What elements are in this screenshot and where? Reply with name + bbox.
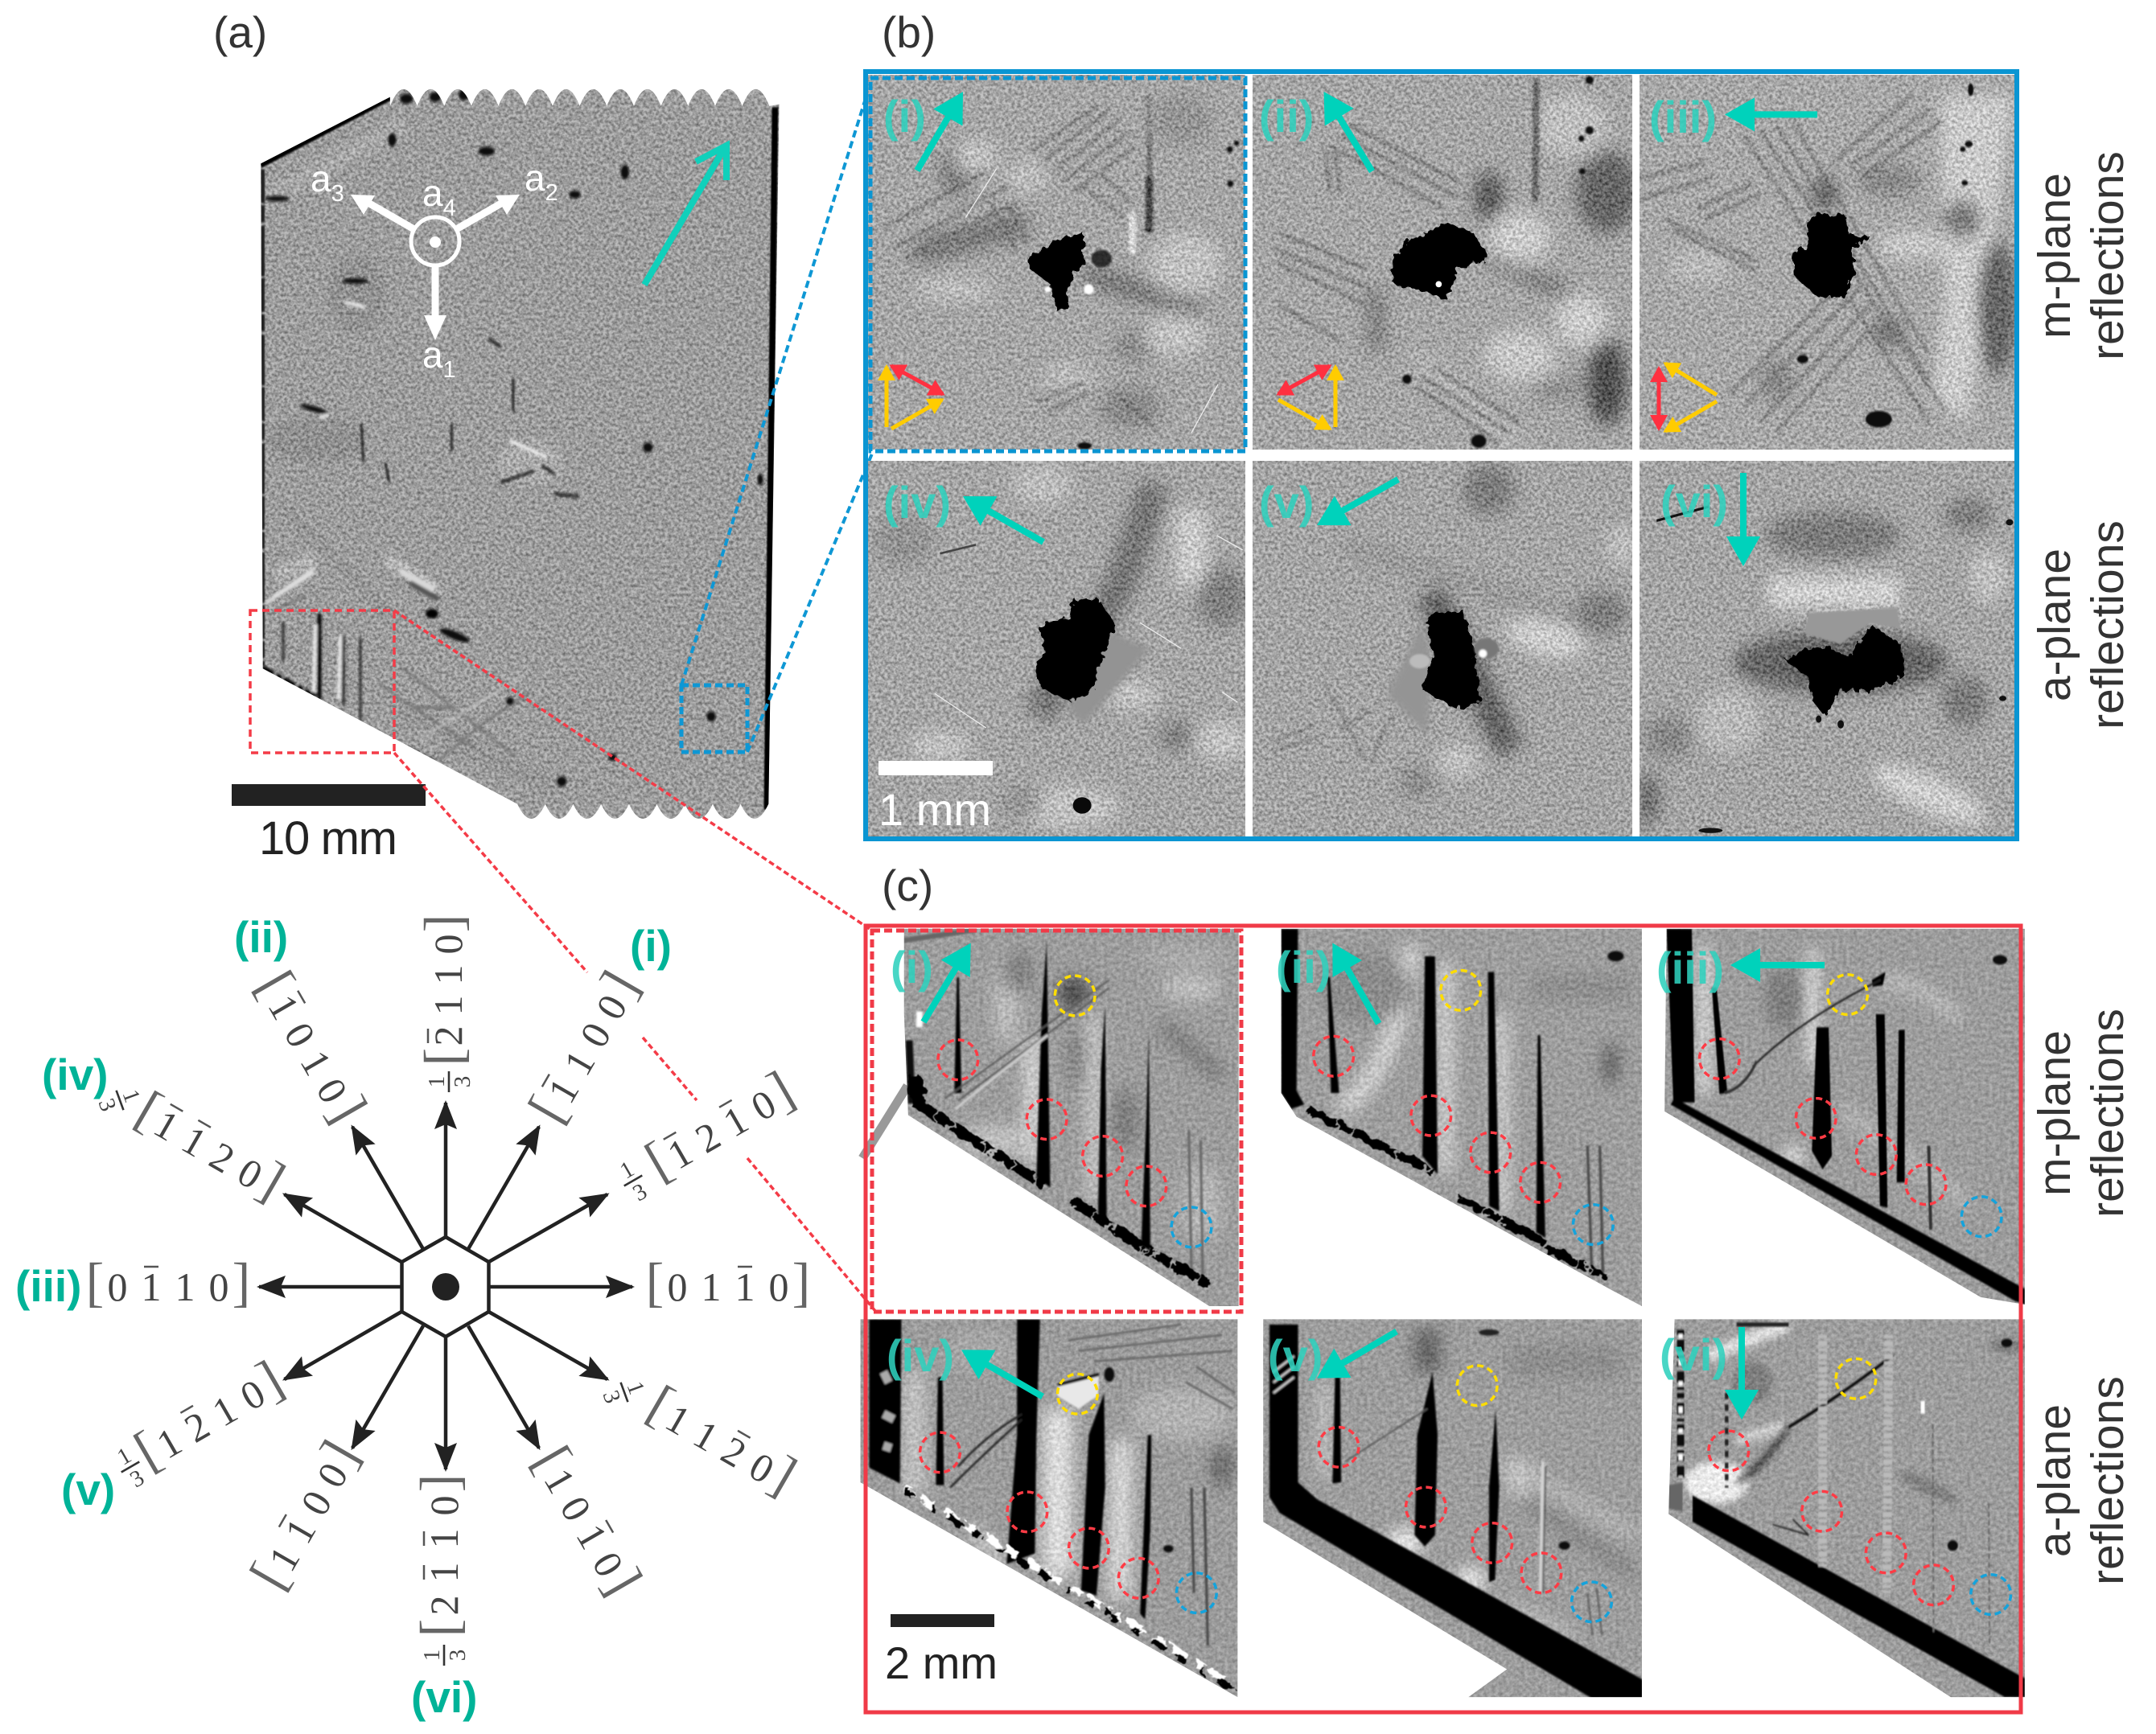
text: one-third fractions (92, 1071, 656, 1666)
arrows: cyan vectors in panel b (917, 109, 1817, 546)
text: Miller indices: ] (760, 1444, 807, 1506)
text: Miller indices: [ (638, 1373, 685, 1435)
frame: red panel c border (866, 926, 2021, 1712)
white bar and label: 1 mm scale (878, 761, 993, 835)
heading: panel b label: (b) (882, 7, 936, 57)
frame: blue panel b border (866, 72, 2017, 839)
arrows: twelve direction vectors (259, 1103, 632, 1469)
text: one-third fractions: 1 (622, 1379, 650, 1398)
labels: green direction numerals: (v) (61, 1465, 115, 1514)
text: a-plane row label for panel b: a-plane (2029, 549, 2080, 701)
arrow: cyan diffraction vector in panel a (644, 146, 726, 285)
text: Miller indices: ] (409, 1474, 470, 1492)
image: c reflection (iii) (1653, 925, 2031, 1327)
text: Miller indices: ] (246, 1348, 293, 1410)
text: one-third fractions: 1 (419, 1650, 445, 1661)
callout: red dashed selection of reflection (i) (872, 931, 1241, 1312)
text: m-plane row label for panel b: m-plane (2029, 173, 2080, 339)
panel: c slip band images (853, 925, 2035, 1705)
image: c reflection (i) (853, 925, 1255, 1327)
text: Miller indices: 1100 (539, 987, 636, 1111)
labels: reflection numerals in panel b (883, 91, 1728, 528)
text: one-third fractions: 1 (615, 1157, 639, 1184)
text: Miller indices: 1120 (146, 1101, 270, 1198)
text: Miller indices: [ (124, 1419, 171, 1481)
callout: red zoom box on panel a (250, 610, 394, 753)
icons: Burgers vector triangles in panel b (887, 364, 1717, 431)
text: Miller indices: [ (126, 1079, 173, 1140)
labels: reflection numerals in panel c: (ii) (1276, 942, 1331, 992)
text: Miller indices: [ (409, 1619, 470, 1637)
image: c reflection (vi) (1665, 1319, 2035, 1705)
text: Miller indices: 1120 (658, 1395, 782, 1492)
image: reflection (iv) (868, 461, 1248, 837)
text: one-third fractions: 1 (113, 1443, 136, 1470)
image: reflection (ii) (1253, 75, 1638, 450)
icon: crystallographic axes a1 to a4: 3 (331, 181, 344, 207)
white bar and label: 2 mm scale: 2 mm (885, 1637, 998, 1688)
text: Miller indices: [ (522, 1436, 584, 1482)
labels: reflection numerals in panel b: (iii) (1649, 92, 1717, 142)
labels: reflection numerals in panel c: (i) (891, 942, 933, 992)
labels: reflection numerals in panel c: (vi) (1660, 1329, 1727, 1380)
image: reflection (vi) (1636, 461, 2015, 837)
labels: reflection numerals in panel c (887, 942, 1727, 1381)
text: one-third fractions: 3 (445, 1650, 471, 1661)
labels: reflection numerals in panel b: (v) (1259, 477, 1314, 528)
text: Miller indices: 1210 (660, 1081, 784, 1177)
text: one-third fractions: 3 (450, 1076, 475, 1087)
labels: green direction numerals (15, 912, 672, 1722)
labels: reflection numerals in panel b: (iv) (883, 477, 951, 528)
callout: blue dashed selection of reflection (i) (870, 78, 1245, 451)
connector: blue lines from zoom box to panel b (681, 78, 872, 752)
text: Miller indices: 0110 (668, 1264, 788, 1309)
text: a-plane row label for panel b: reflections (2082, 520, 2133, 729)
text: one-third fractions: 3 (125, 1465, 149, 1493)
text: Miller indices: [ (86, 1251, 104, 1313)
labels: green direction numerals: (i) (630, 921, 672, 971)
text: m-plane row label for panel b (2029, 151, 2133, 360)
text: Miller indices: 2110 (426, 935, 471, 1046)
image: reflection (i) (868, 75, 1245, 450)
labels: green direction numerals: (ii) (234, 912, 288, 962)
text: Miller indices: ] (413, 914, 474, 932)
labels: reflection numerals in panel b: (i) (883, 91, 926, 142)
arrows: cyan vectors in panel c (924, 960, 1825, 1399)
text: Miller indices: [ (635, 1129, 681, 1191)
white bar and label: 2 mm scale (885, 1614, 998, 1688)
text: Miller indices: ] (249, 1149, 295, 1211)
labels: green direction numerals: (vi) (411, 1672, 478, 1722)
image: c reflection (v) (1263, 1319, 1649, 1705)
lower-left slip bands (262, 568, 531, 762)
panel: b dislocation images (868, 75, 2017, 837)
icon: crystallographic axes a1 to a4 (311, 157, 558, 383)
markers: dashed defect circles in panel c right column (1699, 975, 2010, 1614)
text: Miller indices: [ (646, 1251, 664, 1313)
text: Miller indices: [ (516, 1086, 578, 1132)
text: a-plane row label for panel c: a-plane (2029, 1404, 2080, 1557)
scale bar: 10 mm: 10 mm (259, 812, 397, 865)
text: Miller indices: ] (757, 1058, 804, 1120)
text: Miller indices: 1010 (536, 1461, 632, 1584)
image: c reflection (ii) (1263, 925, 1657, 1327)
icon: central hexagon with dot (402, 1237, 489, 1337)
text: Miller indices: 1010 (260, 987, 356, 1111)
icon: crystallographic axes a1 to a4: 1 (443, 357, 456, 383)
text: a-plane row label for panel b (2029, 520, 2133, 729)
text: Miller indices: 1210 (149, 1370, 273, 1467)
labels: reflection numerals in panel b: (vi) (1660, 476, 1728, 527)
text: Miller indices: [ (413, 1048, 474, 1066)
callout: blue zoom box on panel a (681, 685, 747, 752)
icon: crystallographic axes a1 to a4: a (525, 157, 545, 199)
text: Miller indices: ] (593, 1558, 655, 1605)
text: Miller indices: ] (308, 1430, 370, 1477)
text: one-third fractions: 3 (628, 1178, 652, 1206)
panel: full crystal topograph (a) (261, 88, 780, 819)
icon: crystallographic axes a1 to a4: 2 (545, 180, 558, 206)
scale bar: 10 mm (232, 784, 426, 865)
white bar and label: 1 mm scale: 1 mm (878, 784, 991, 835)
labels: reflection numerals in panel c: (v) (1268, 1330, 1323, 1381)
text: a-plane row label for panel c (2029, 1376, 2133, 1585)
defect spots and streaks (265, 89, 763, 787)
image: reflection (iii) (1640, 75, 2017, 450)
text: m-plane row label for panel c: m-plane (2029, 1030, 2080, 1196)
text: one-third fractions: 3 (598, 1387, 626, 1407)
icon: crystallographic axes a1 to a4: a (422, 334, 443, 376)
image: reflection (v) (1253, 461, 1638, 837)
text: one-third fractions: 1 (117, 1087, 146, 1106)
text: Miller indices: ] (792, 1251, 810, 1313)
text: Miller indices: 0110 (108, 1264, 228, 1309)
labels: green direction numerals: (iii) (15, 1261, 81, 1311)
icon: crystallographic axes a1 to a4: a (422, 172, 443, 214)
connector: red lines from zoom box to panel c (394, 610, 875, 1311)
icon: crystallographic axes a1 to a4: a (311, 158, 331, 199)
diagram: crystallographic direction star (15, 912, 810, 1722)
image: c reflection (iv) (853, 1319, 1247, 1705)
text: one-third fractions: 1 (424, 1076, 450, 1087)
labels: reflection numerals in panel c: (iii) (1656, 943, 1724, 993)
labels: reflection numerals in panel b: (ii) (1259, 91, 1314, 142)
labels: green direction numerals: (iv) (42, 1050, 108, 1099)
text: m-plane row label for panel b: reflections (2082, 151, 2133, 360)
text: Miller indices: ] (232, 1251, 250, 1313)
text: a-plane row label for panel c: reflections (2082, 1376, 2133, 1585)
text: Miller indices: ] (318, 1086, 380, 1132)
text: Miller indices: [ (237, 1552, 299, 1599)
text: Miller indices: 2110 (422, 1496, 467, 1615)
text: Miller indices: [ (245, 960, 307, 1007)
heading: panel c label: (c) (882, 861, 933, 910)
text: one-third fractions: 3 (93, 1095, 121, 1115)
text: m-plane row label for panel c: reflections (2082, 1009, 2133, 1218)
text: Miller indices: ] (588, 960, 650, 1007)
heading: panel a label: (a) (213, 7, 267, 57)
markers: dashed defect circles in panel c left columns (920, 971, 1613, 1622)
labels: reflection numerals in panel c: (iv) (887, 1330, 954, 1381)
crystal edges (261, 97, 775, 812)
text: Miller indices: 1100 (260, 1455, 356, 1579)
text: Miller indices (86, 914, 810, 1637)
icon: crystallographic axes a1 to a4: 4 (443, 195, 456, 221)
text: m-plane row label for panel c (2029, 1009, 2133, 1218)
